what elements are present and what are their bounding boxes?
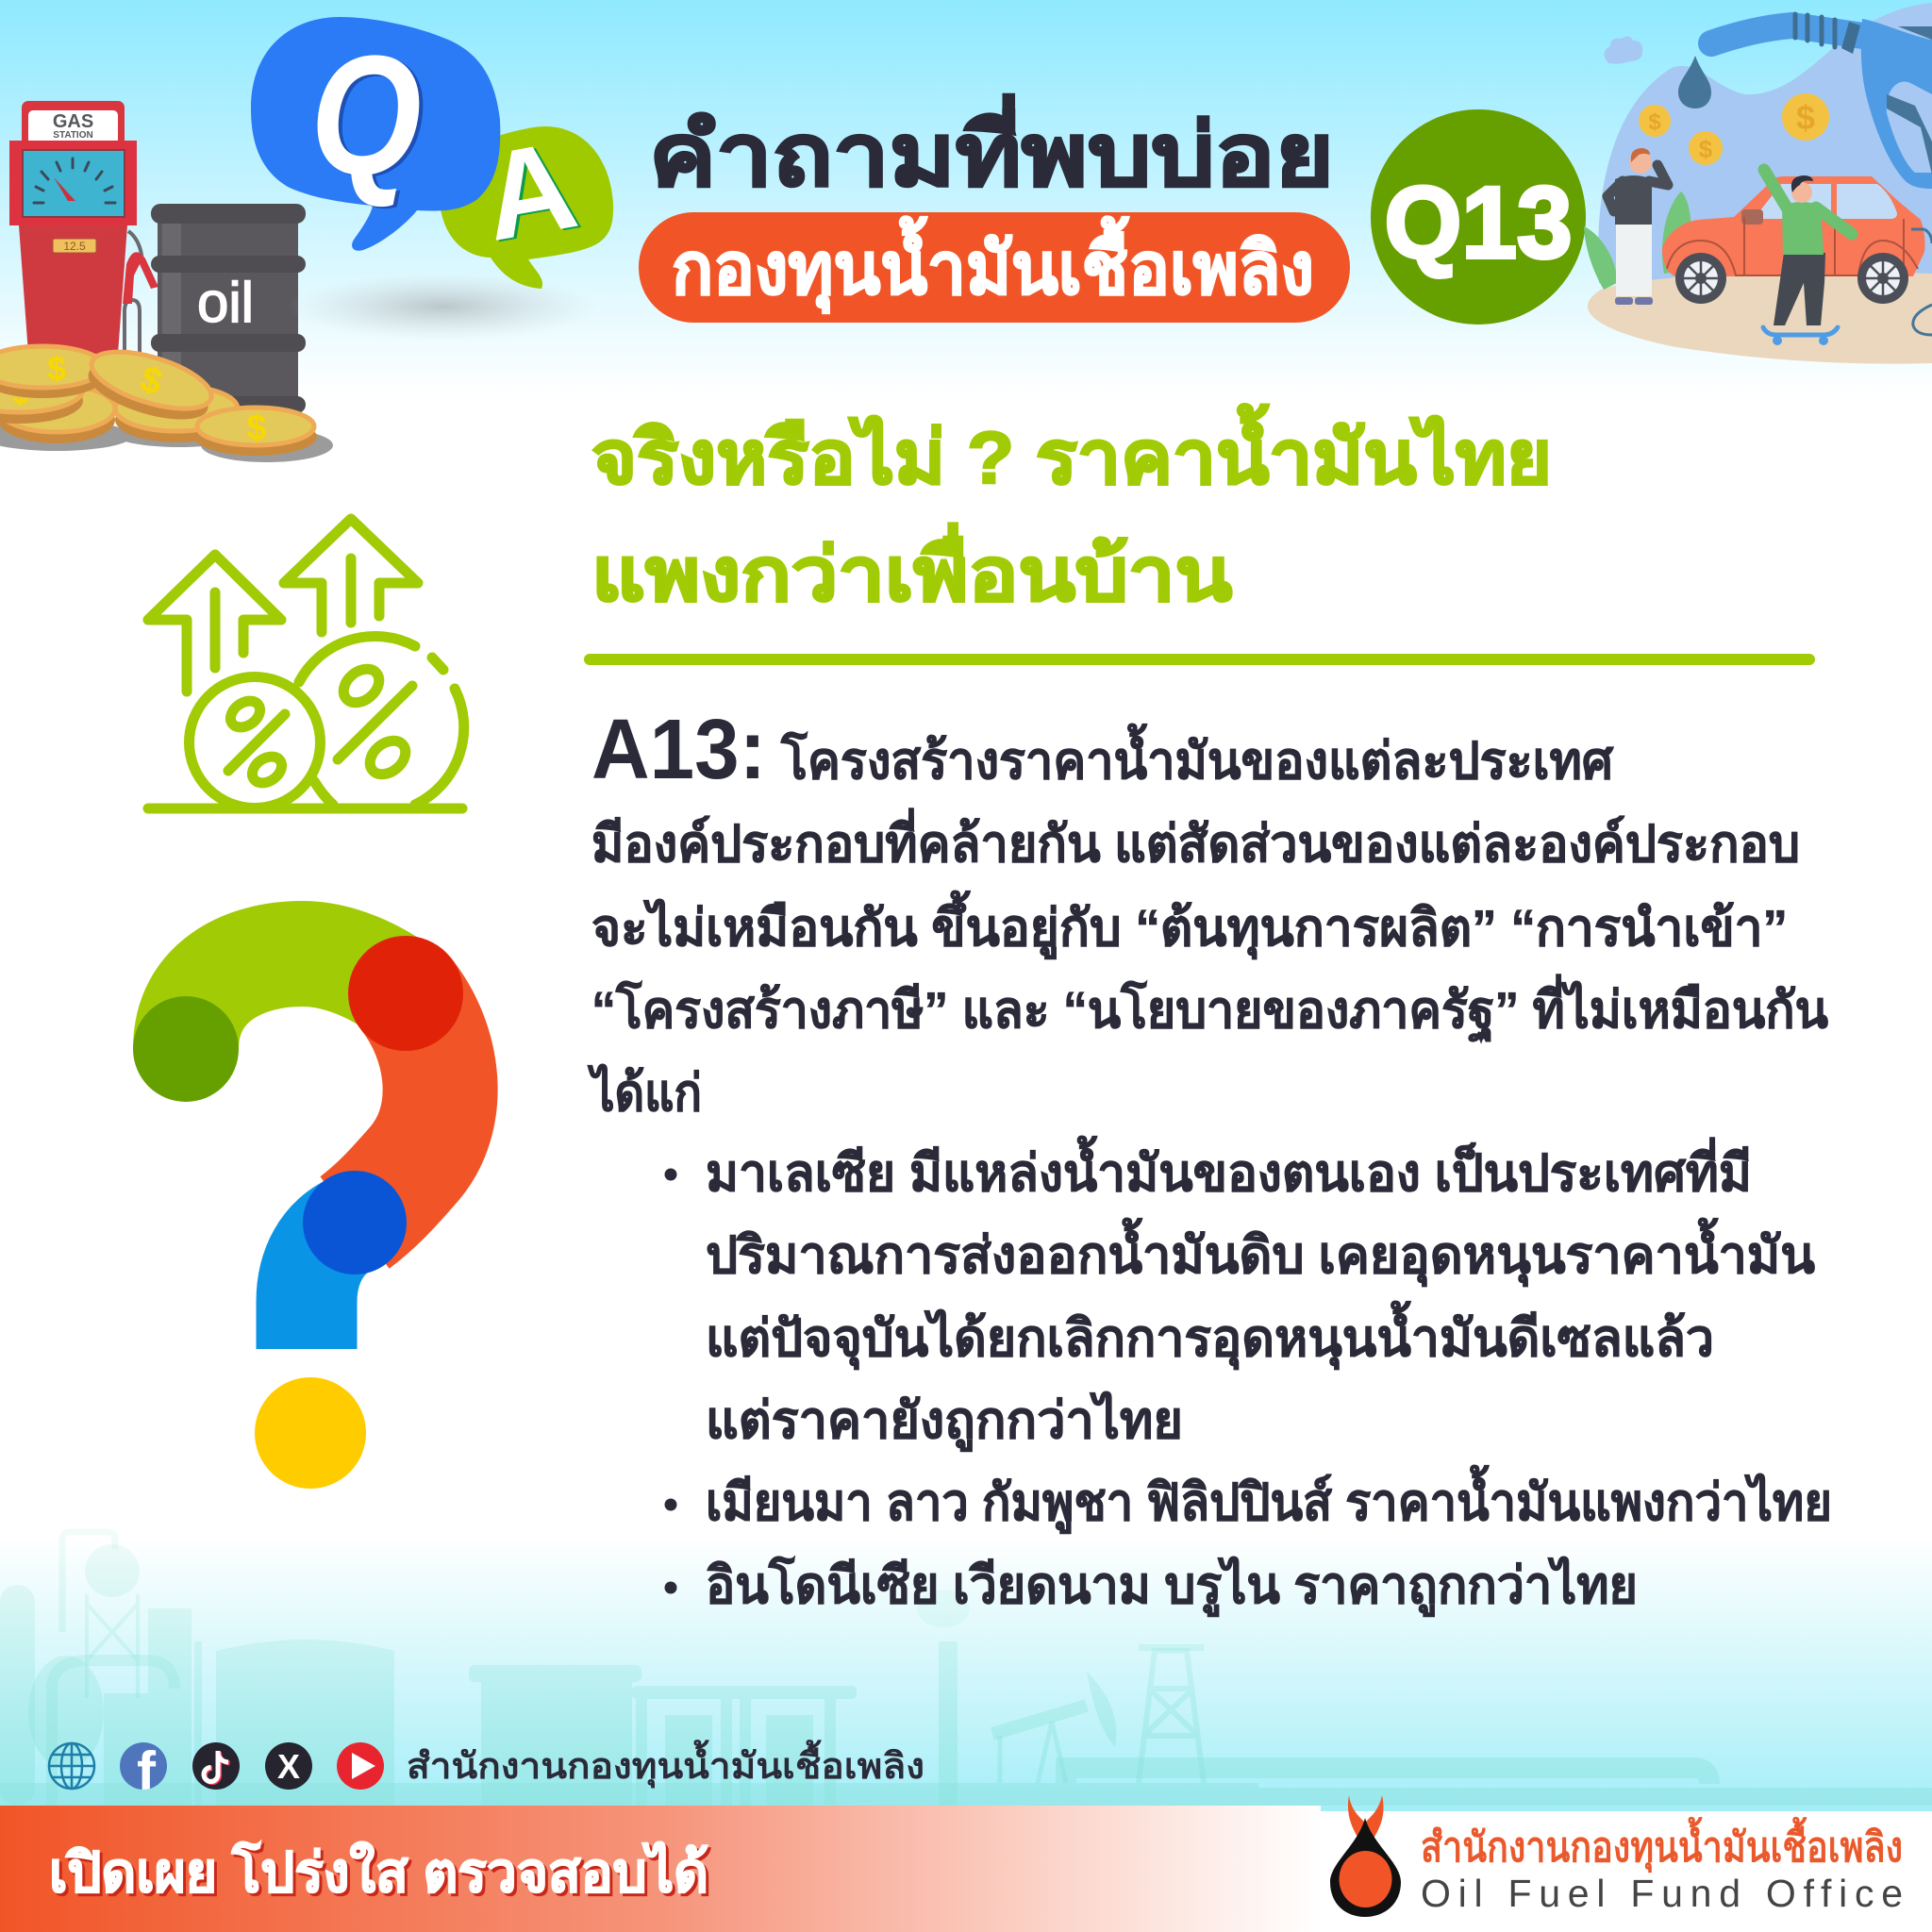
bullet list: เมียนมา ลาว กัมพูชา ฟิลิปปินส์ ราคาน้ำมันแพงกว่าไทย	[706, 1465, 1832, 1534]
man scratching head	[1607, 148, 1668, 305]
oil barrel: oil	[197, 271, 254, 334]
coin stack: $	[47, 349, 66, 388]
heading rule	[584, 654, 1815, 665]
bullet list: อินโดนีเซีย เวียดนาม บรูไน ราคาถูกกว่าไทย	[706, 1556, 1638, 1617]
dollar coins: $	[1796, 98, 1815, 137]
answer bubble: A	[474, 115, 586, 267]
subtitle pill	[639, 212, 1350, 323]
question bubble	[251, 17, 500, 251]
ground	[1588, 272, 1932, 364]
answer label A13: A13:	[591, 703, 766, 797]
answer paragraph: ได้แก่	[587, 1063, 702, 1122]
bullet list	[664, 1136, 1832, 1617]
coin stack: $	[13, 379, 29, 410]
icon: x	[265, 1742, 312, 1790]
dollar coins: $	[1699, 135, 1713, 163]
icon: x: X	[277, 1747, 300, 1786]
answer text block	[587, 703, 1832, 1617]
icon: facebook	[120, 1742, 167, 1790]
dollar coins	[1639, 93, 1829, 165]
logo flame and drop	[1330, 1795, 1401, 1917]
heading: question line 2: แพงกว่าเพื่อนบ้าน	[591, 523, 1232, 616]
dollar coins: $	[1648, 109, 1661, 135]
answer paragraph: โครงสร้างราคาน้ำมันของแต่ละประเทศ	[780, 724, 1614, 790]
leaves behind car	[1662, 192, 1691, 274]
subtitle pill: กองทุนน้ำมันเชื้อเพลิง	[672, 216, 1314, 314]
coin stack: $	[136, 359, 167, 403]
answer paragraph: “โครงสร้างภาษี” และ “นโยบายของภาครัฐ” ที่ไม่เหมือนกัน	[591, 974, 1828, 1043]
icon: youtube	[337, 1742, 384, 1790]
logo English name: Oil Fuel Fund Office	[1421, 1872, 1903, 1915]
badge: Q13: Q13	[1385, 165, 1572, 279]
bullet list: ปริมาณการส่งออกน้ำมันดิบ เคยอุดหนุนราคาน้ำมัน	[706, 1218, 1815, 1288]
answer paragraph	[587, 724, 1828, 1122]
gas pump: 12.5	[63, 240, 86, 253]
icon: tiktok	[192, 1742, 240, 1790]
bullet list: มาเลเซีย มีแหล่งน้ำมันของตนเอง เป็นประเทศที่มี	[706, 1136, 1752, 1202]
illustration: gas pump, oil barrel and coins	[0, 101, 333, 462]
icon: Q and A speech bubbles	[251, 17, 613, 341]
footer band gradient	[0, 1806, 1321, 1932]
answer bubble: A	[476, 116, 589, 268]
answer paragraph: จะไม่เหมือนกัน ขึ้นอยู่กับ “ต้นทุนการผลิต” “การนำเข้า”	[591, 891, 1788, 960]
title: คำถามที่พบบ่อย	[649, 93, 1334, 204]
red car	[1662, 176, 1932, 335]
answer bubble	[440, 115, 613, 289]
answer paragraph: มีองค์ประกอบที่คล้ายกัน แต่สัดส่วนของแต่ละองค์ประกอบ	[591, 808, 1800, 873]
social media icons	[47, 1741, 384, 1790]
gas pump: GAS	[53, 111, 93, 132]
cloud	[1604, 36, 1642, 64]
oil drop	[1678, 56, 1711, 108]
icon: rising percent arrows	[148, 519, 464, 808]
blue blob backdrop	[1598, 3, 1932, 283]
question bubble: Q	[310, 22, 422, 210]
heading: question line 1: จริงหรือไม่ ? ราคาน้ำมันไทย	[591, 404, 1552, 499]
social handle: สำนักงานกองทุนน้ำมันเชื้อเพลิง	[407, 1740, 924, 1789]
bullet list: แต่ปัจจุบันได้ยกเลิกการอุดหนุนน้ำมันดีเซลแล้ว	[706, 1301, 1714, 1371]
icon: colourful question mark	[133, 936, 463, 1489]
refinery skyline silhouette	[0, 1532, 1932, 1806]
coin stack	[0, 341, 333, 462]
logo: Oil Fuel Fund Office	[1330, 1795, 1903, 1917]
illustration: fuel nozzle, car and people	[1584, 3, 1932, 364]
bullet list: แต่ราคายังถูกกว่าไทย	[706, 1391, 1183, 1452]
background: sky gradient	[0, 0, 1932, 396]
gas pump	[9, 101, 158, 363]
icon: facebook: f	[137, 1740, 157, 1804]
badge: Q13	[1371, 109, 1586, 325]
background: lower gradient	[0, 1538, 1932, 1811]
icon: globe	[49, 1743, 94, 1789]
oil barrel	[151, 204, 306, 413]
gas pump: STATION	[53, 130, 93, 141]
coin stack: $	[246, 408, 267, 448]
footer slogan: เปิดเผย โปร่งใส ตรวจสอบได้	[49, 1840, 708, 1904]
footer slogan: เปิดเผย โปร่งใส ตรวจสอบได้	[52, 1842, 711, 1907]
man on skateboard	[1763, 170, 1852, 345]
leaves	[1584, 226, 1617, 290]
fuel nozzle	[1711, 14, 1932, 189]
question bubble: Q	[314, 24, 425, 212]
